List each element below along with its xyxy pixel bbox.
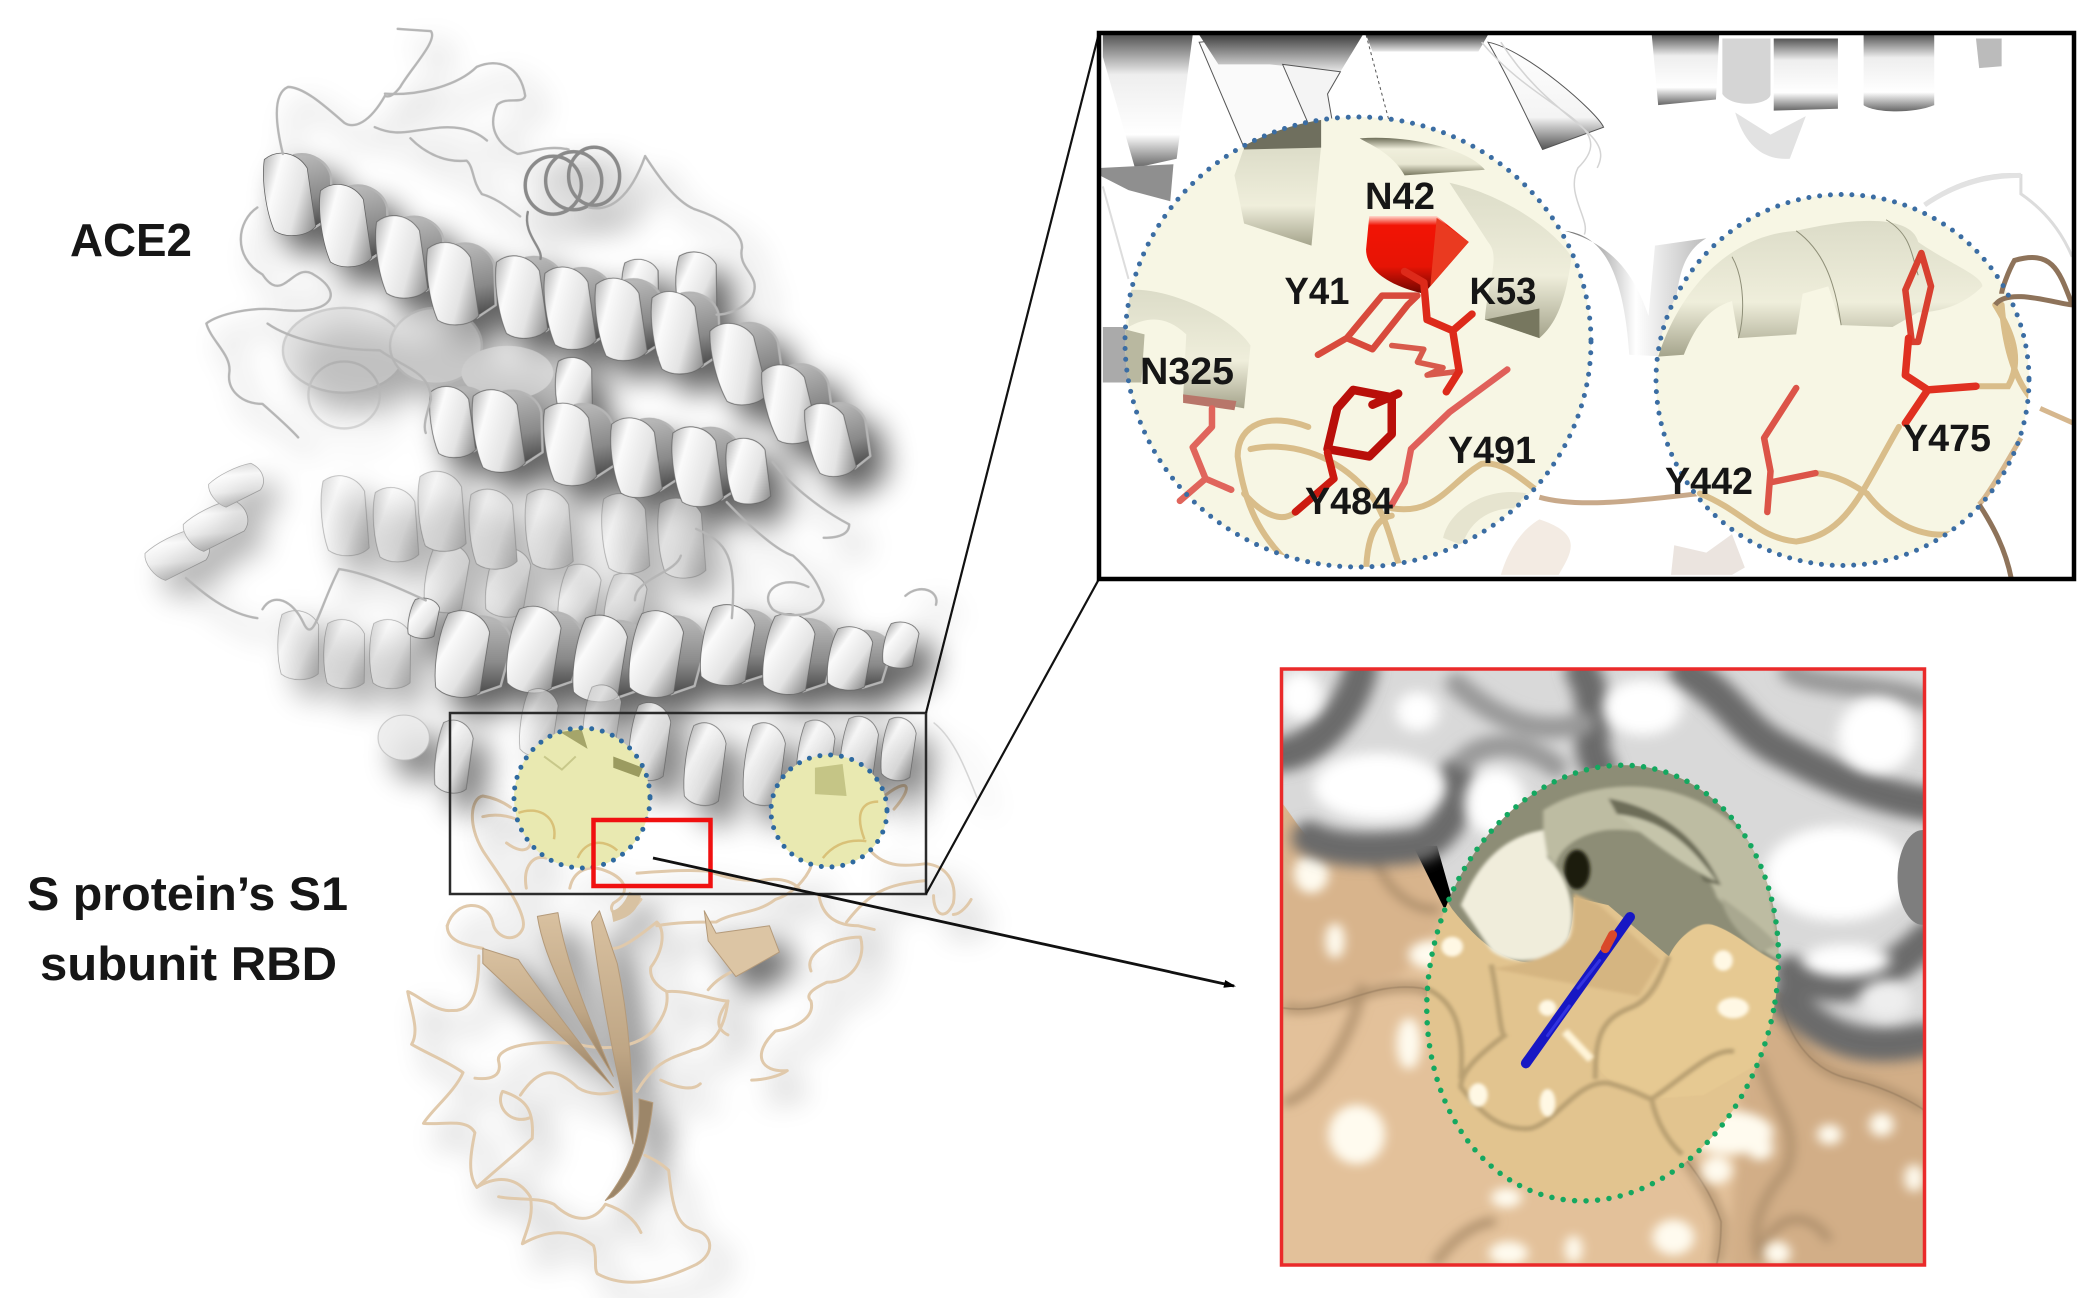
dotted circles [1125, 117, 1591, 567]
residues: red sticks [1180, 216, 1976, 512]
tan contour lines [1283, 987, 1925, 1265]
N42 red block [1366, 216, 1469, 294]
label: S protein's S1 subunit RBD [27, 867, 348, 990]
upper helix [252, 148, 882, 482]
red selection box on overview [594, 820, 710, 886]
panel frame: surface pocket [1282, 669, 1924, 1265]
coil [525, 147, 620, 259]
panel: surface pocket with ligand [1283, 670, 1923, 1264]
grey ACE2 surface [1283, 670, 1923, 1035]
loops [385, 29, 432, 96]
residue labels: K53 [1470, 271, 1536, 313]
tan loops right side [1925, 175, 2082, 579]
arrow to surface panel [653, 858, 1234, 986]
tan surface shading [1283, 806, 1923, 1264]
tan loop between circles [1539, 493, 1700, 503]
selection box on overview [450, 713, 926, 894]
zoom guide lines to detail panel [926, 33, 1099, 894]
residue labels: Y442 [1665, 461, 1753, 503]
residue labels: Y491 [1448, 430, 1536, 472]
grey helices in detail panel [1100, 35, 2072, 575]
grey shading [1279, 668, 1929, 1045]
protein structure: S protein S1 subunit RBD ribbon [408, 786, 971, 1282]
panel: residue detail [1099, 33, 2082, 579]
faint helices [139, 308, 716, 691]
middle helix [419, 355, 780, 511]
residue sticks [1318, 296, 1417, 355]
residue labels: N42 [1365, 176, 1435, 218]
ligand [1526, 917, 1630, 1063]
helix row at interface [378, 685, 977, 806]
lower helix [408, 598, 919, 702]
residue labels: N325 [1140, 351, 1234, 393]
label: S protein's S1 subunit RBD: S protein’s S1 [27, 867, 348, 920]
protein structure: ACE2 grey ribbon [139, 29, 977, 806]
residue labels: Y484 [1305, 481, 1393, 523]
residue labels: Y475 [1903, 418, 1991, 460]
cream ribbons left circle [1116, 116, 1572, 577]
residue labels: Y41 [1284, 271, 1350, 313]
label: ACE2: ACE2 [70, 214, 192, 266]
residue labels [1140, 176, 1991, 523]
interface region inside oval [1427, 765, 1778, 1201]
green dotted oval [1424, 762, 1782, 1204]
highlighted contact circles on overview [514, 728, 887, 868]
cream ribbons right circle [1658, 219, 2028, 545]
label: S protein's S1 subunit RBD: subunit RBD [40, 937, 337, 990]
tan highlights [1294, 854, 1924, 1265]
circle backgrounds [1125, 117, 1591, 567]
panel frame: residue detail [1099, 33, 2074, 579]
gold lobes [1668, 924, 1778, 1062]
